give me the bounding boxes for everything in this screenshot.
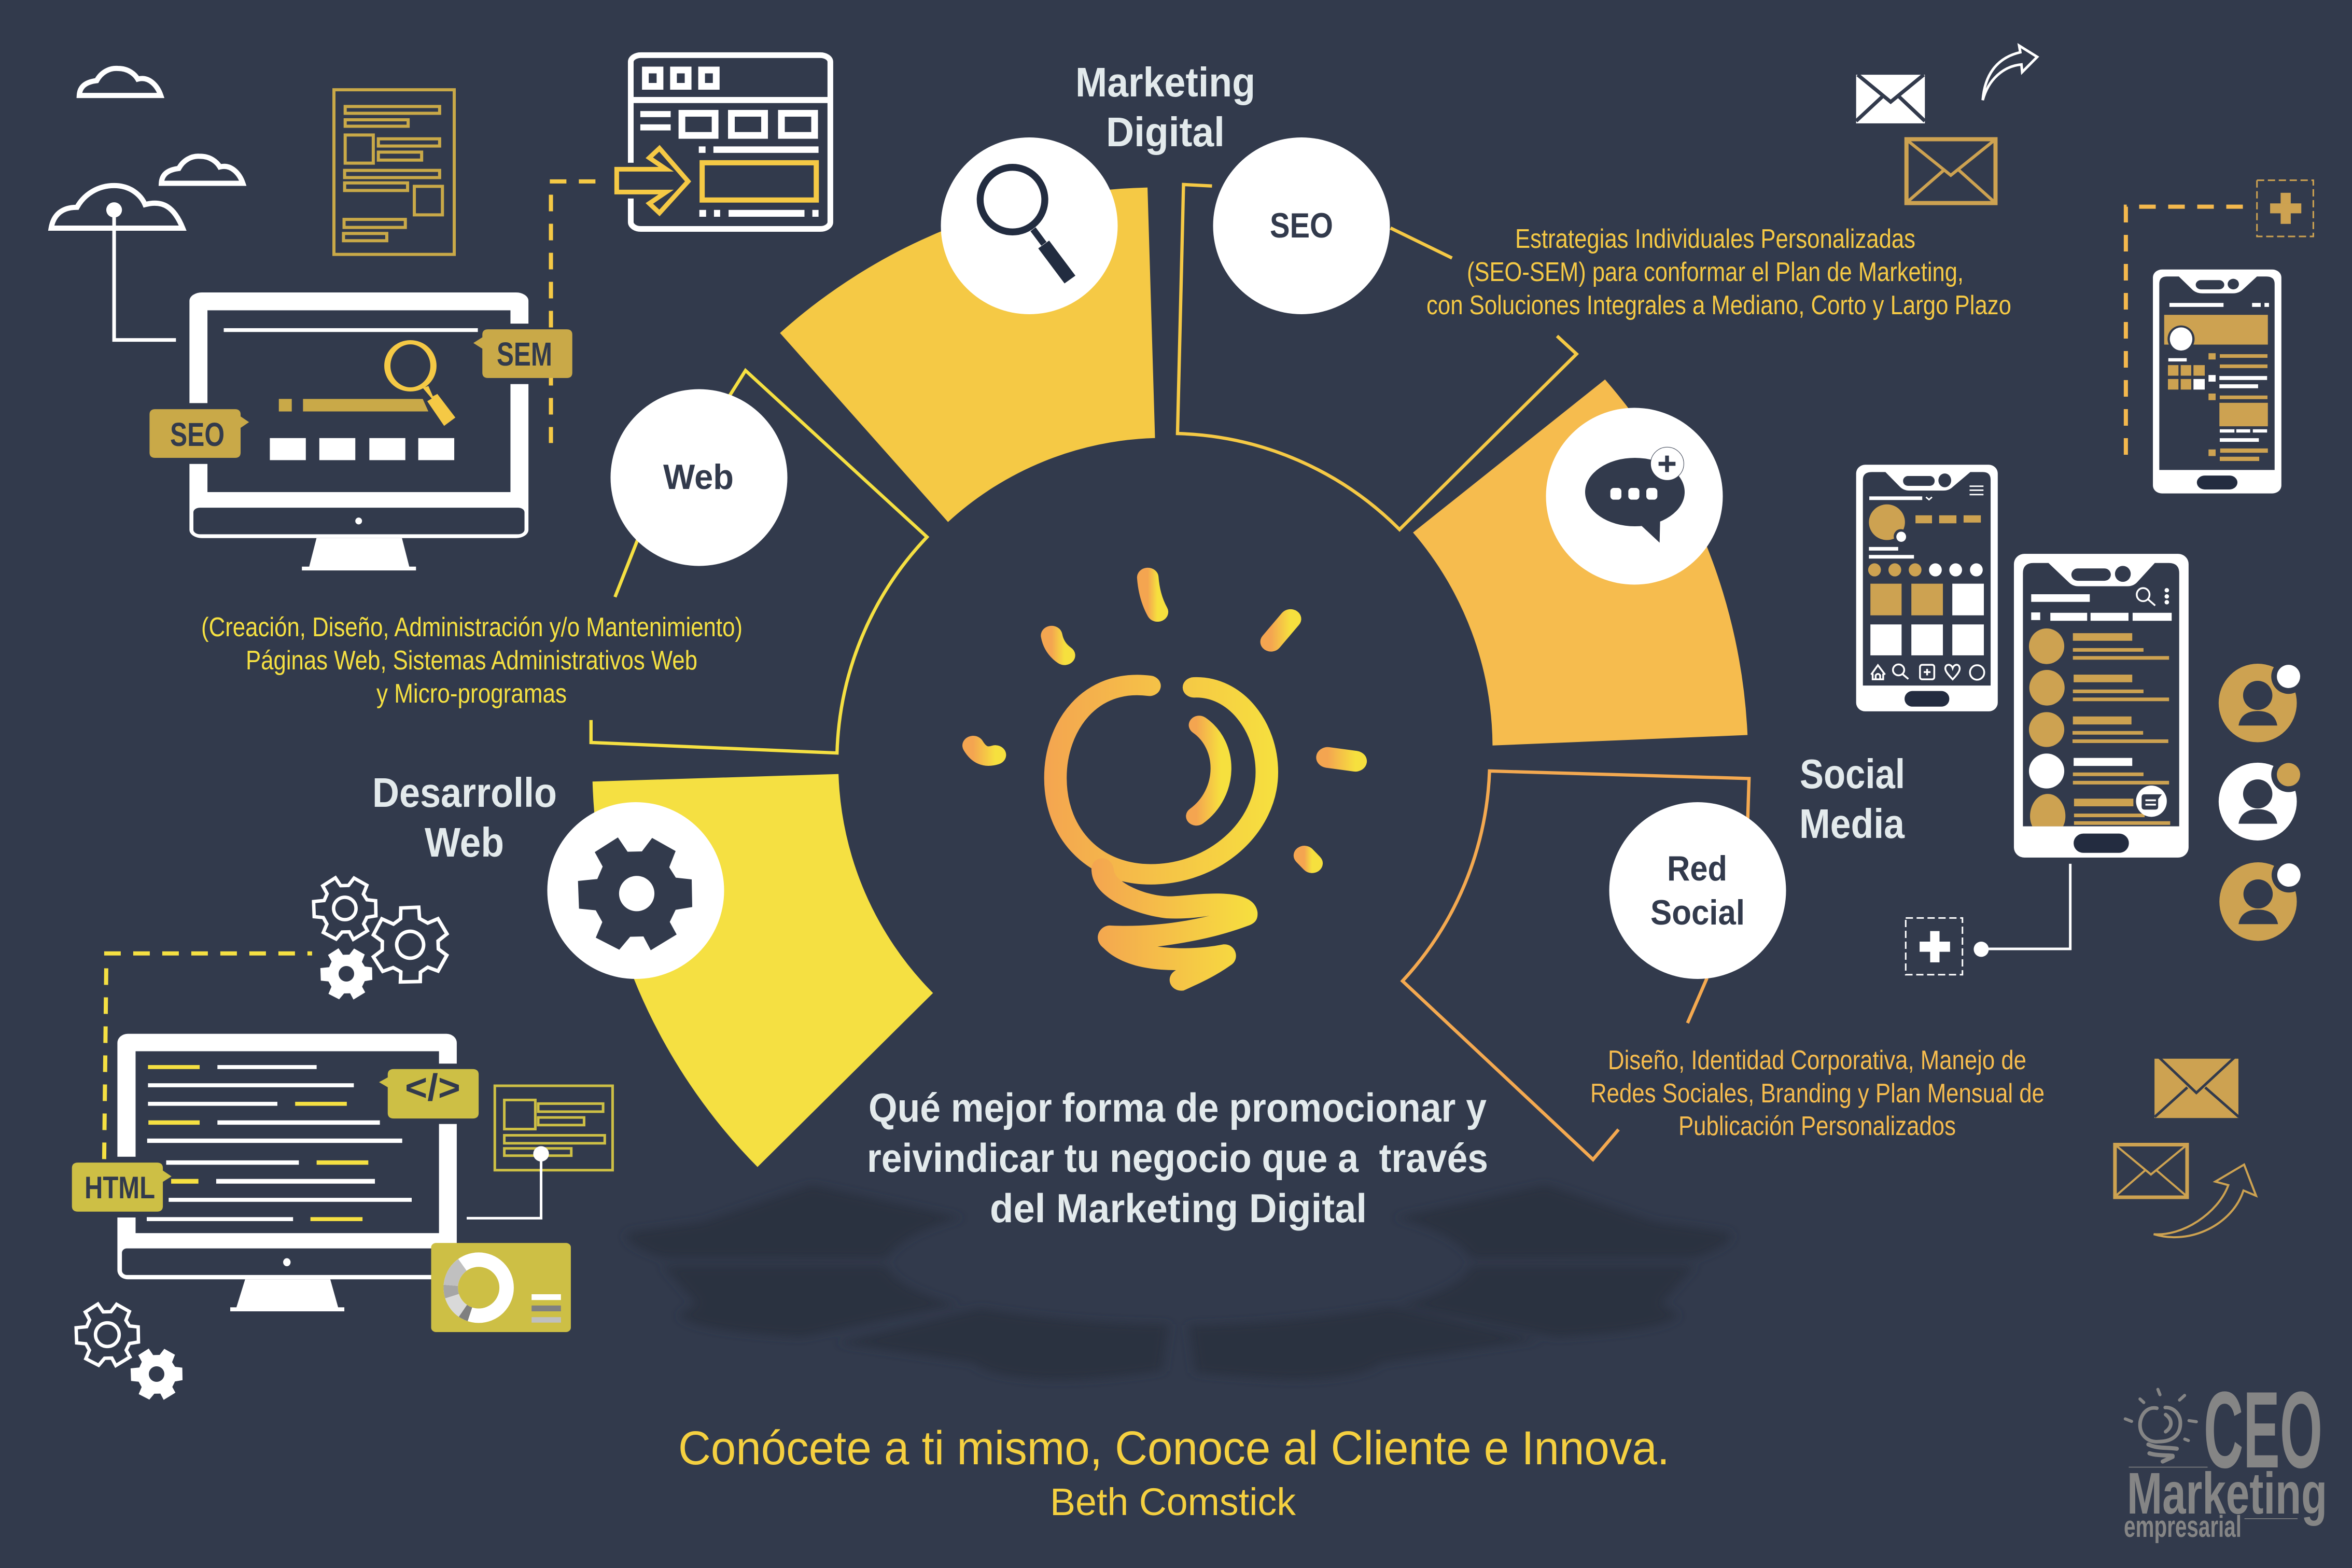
icon: envelopes and arrow bottom right	[2115, 1057, 2256, 1237]
icon: outline gear bottom	[76, 1304, 138, 1366]
monitor: SEO SEM	[186, 292, 531, 570]
quote author: Beth Comstick	[1050, 1480, 1296, 1523]
phone: photo grid layout	[1856, 465, 1998, 711]
heading: Marketing Digital: Marketing	[1075, 59, 1255, 105]
label: SEO	[149, 409, 249, 458]
icon: user avatar gold 2	[2219, 858, 2306, 941]
outline: SEO	[1178, 185, 1576, 529]
dashed connector and plus box top right	[2126, 180, 2313, 455]
text block: Web description: (Creación, Diseño, Administración y/o Mantenimiento)	[201, 612, 743, 642]
text block: Red Social description: Diseño, Identidad Corporativa, Manejo de	[1608, 1045, 2026, 1075]
icon: user avatar gold 1	[2219, 659, 2306, 743]
text block: Web description: y Micro-programas	[376, 679, 567, 709]
circle label: Social: Social	[1650, 893, 1745, 932]
circle: magnifier	[941, 137, 1118, 314]
text block: central message	[867, 1085, 1488, 1231]
text block: Web description	[201, 612, 743, 709]
text block: SEO description: Estrategias Individuales Personalizadas	[1515, 224, 1915, 254]
floor shadow of the radial diagram	[627, 1185, 1731, 1380]
label: SEM	[473, 329, 572, 378]
monitor: HTML	[114, 1034, 461, 1311]
icon: browser window with arrow	[617, 55, 830, 229]
icon: small document with connector	[467, 1086, 612, 1218]
text block: Red Social description: Redes Sociales, Branding y Plan Mensual de	[1590, 1079, 2045, 1109]
quote: Conócete a ti mismo, Conoce al Cliente e Innova.	[678, 1422, 1670, 1475]
icon: outline gear top right	[359, 894, 461, 996]
dashed connector: SEO monitor to browser	[550, 181, 597, 443]
icon: solid gear top	[320, 948, 372, 1000]
text block: SEO description	[1426, 224, 2011, 320]
circle: Web	[611, 389, 787, 566]
outline: Web	[591, 371, 927, 753]
circle: SEO	[1213, 137, 1390, 314]
plus box with connector	[1906, 864, 2070, 975]
icon: light bulb	[973, 578, 1355, 991]
heading line: Web: Web	[425, 819, 504, 865]
text block: Web description: Páginas Web, Sistemas Administrativos Web	[246, 646, 697, 676]
circle label: Web: Web	[663, 457, 734, 497]
heading line: Digital: Digital	[1106, 109, 1225, 155]
text block: central message: reivindicar tu negocio que a través	[867, 1135, 1488, 1181]
dashed connector: HTML monitor to gears	[104, 954, 312, 1159]
text block: SEO description: (SEO-SEM) para conformar el Plan de Marketing,	[1467, 257, 1964, 287]
radial diagram: sectors and outlines	[591, 185, 1749, 1167]
heading: Desarrollo: Desarrollo	[372, 769, 557, 816]
icon: solid gear bottom	[131, 1349, 183, 1400]
outline: Red Social	[1403, 771, 1749, 1159]
label: SEM: SEM	[497, 335, 552, 373]
icon: user avatar white	[2219, 757, 2306, 841]
card: donut chart	[431, 1243, 571, 1332]
label: HTML	[72, 1163, 172, 1212]
label: code tag: </>	[405, 1067, 460, 1109]
sector: Marketing Digital	[780, 188, 1155, 522]
circle label: SEO: SEO	[1270, 206, 1333, 245]
text block: central message: del Marketing Digital	[990, 1185, 1367, 1231]
phone: contact list layout	[2014, 554, 2189, 858]
circle: chat	[1546, 408, 1723, 585]
circle: Red Social	[1609, 802, 1786, 979]
logo: CEO Marketing empresarial: empresarial	[2124, 1510, 2242, 1544]
text block: Red Social description	[1590, 1045, 2045, 1141]
sector: Social Media	[1413, 380, 1747, 746]
label: HTML: HTML	[85, 1170, 155, 1205]
icon: envelopes and share arrow top right	[1856, 46, 2037, 203]
circle label: Red: Red	[1667, 849, 1727, 888]
label: SEO: SEO	[170, 416, 225, 453]
text block: central message: Qué mejor forma de promocionar y	[869, 1085, 1487, 1130]
heading line: Media: Media	[1799, 801, 1905, 847]
label: code tag	[379, 1067, 479, 1118]
text block: Red Social description: Publicación Personalizados	[1678, 1111, 1956, 1141]
clouds with connector	[51, 68, 243, 340]
circle: gear	[548, 802, 724, 979]
icon: outline gear top left	[314, 878, 376, 940]
icon: document	[334, 90, 454, 255]
sector: Desarrollo Web	[593, 774, 933, 1167]
phone: profile layout	[2153, 270, 2281, 494]
text block: SEO description: con Soluciones Integrales a Mediano, Corto y Largo Plazo	[1426, 290, 2011, 320]
heading: Social: Social	[1800, 751, 1905, 797]
logo: CEO Marketing empresarial	[2124, 1369, 2327, 1544]
